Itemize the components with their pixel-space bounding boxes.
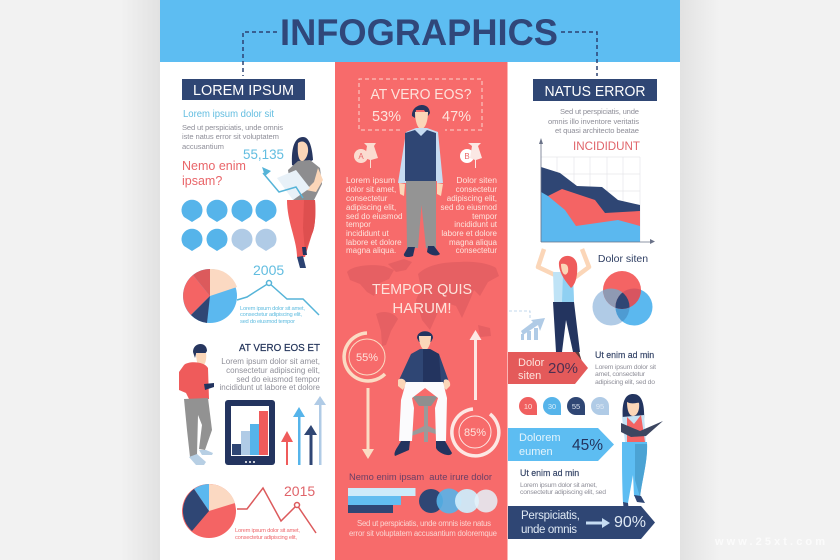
center panel	[335, 62, 508, 560]
text block B: incididunt ut	[454, 220, 498, 229]
banner: dolorem eumen 45%: Dolorem	[519, 432, 561, 444]
dashed frame	[359, 79, 482, 130]
text block B	[441, 175, 498, 255]
text block: at vero eos et: consectetur adipiscing elit,	[226, 366, 320, 375]
text block: at vero eos et	[219, 357, 321, 392]
text block: ut enim: adipiscing elit, sed do	[595, 379, 655, 386]
heading: natus error	[533, 79, 657, 101]
bubble 30: 30	[548, 402, 556, 411]
arrow navy	[304, 425, 317, 465]
dashed connector right	[561, 32, 597, 76]
text block right intro	[548, 107, 639, 135]
subheading: Lorem ipsum dolor sit	[183, 109, 274, 120]
arrow blue	[293, 407, 305, 465]
text block: at vero eos et: Lorem ipsum dolor sit amet,	[221, 357, 320, 366]
bubble 30	[543, 397, 561, 415]
banner: dolor siten 20%	[508, 352, 588, 384]
world map	[347, 259, 499, 346]
progress ring 55%	[344, 333, 385, 381]
caption 2005: Lorem ipsum dolor sit amet,	[240, 306, 305, 312]
caption 2015: consectetur adipiscing elit,	[235, 535, 297, 541]
arrow down	[362, 388, 374, 459]
text block center bottom: error sit voluptatem accusantium doloremque	[349, 529, 497, 538]
banner: perspiciatis 90%: unde omnis	[521, 524, 577, 536]
text block B: Dolor siten	[456, 175, 497, 185]
text block A: tempor	[346, 220, 371, 229]
text block B: consectetur	[456, 185, 497, 194]
text block A: magna aliqua.	[346, 246, 396, 255]
arrow up	[470, 330, 482, 400]
stat 55,135: 55,135	[243, 147, 284, 162]
text block B: tempor	[472, 212, 497, 221]
banner: dolorem eumen 45%	[508, 428, 614, 461]
text block right intro: et quasi architecto beatae	[555, 126, 639, 135]
heading: tempor quis harum: HARUM!	[392, 300, 452, 317]
backdrop shadow left	[120, 0, 160, 560]
pin icons grid	[181, 200, 276, 251]
bubble 55: 55	[572, 402, 580, 411]
text block right intro: omnis illo inventore veritatis	[548, 117, 639, 126]
banner: perspiciatis 90%: 90%	[614, 514, 646, 531]
text block A: labore et dolore	[346, 238, 402, 247]
banner: dolor siten 20%: Dolor	[518, 357, 545, 369]
stat 47%: 47%	[442, 109, 471, 125]
text block B: consectetur	[456, 246, 497, 255]
text block B: magna aliqua	[449, 238, 498, 247]
text block left intro	[182, 123, 283, 151]
figure: seated man	[395, 331, 452, 456]
text block: at vero eos et: sed do eiusmod tempor	[236, 375, 320, 384]
figure: woman with chart	[262, 137, 323, 268]
pie chart 2015	[182, 484, 236, 538]
banner: dolor siten 20%: siten	[518, 370, 541, 382]
banner: perspiciatis 90%: Perspiciatis,	[521, 510, 580, 522]
caption 2015: Lorem ipsum dolor sit amet,	[235, 528, 300, 534]
area chart	[539, 138, 655, 244]
text block center bottom: Sed ut perspiciatis, unde omnis iste natus	[357, 519, 491, 528]
heading: tempor quis harum: TEMPOR QUIS	[372, 281, 472, 298]
year 2015: 2015	[284, 483, 315, 499]
header band	[160, 0, 680, 62]
tablet bar chart	[225, 400, 275, 465]
venn diagram	[592, 271, 652, 326]
bubble 55	[567, 397, 585, 415]
pie chart 2005	[183, 269, 237, 323]
text block: ut enim	[595, 350, 656, 386]
text block center bottom	[349, 519, 497, 538]
text block B: labore et dolore	[441, 229, 498, 238]
text block: ut enim 2: consectetur adipiscing elit, sed	[520, 489, 606, 496]
banner: dolor siten 20%: 20%	[548, 360, 578, 377]
banner: perspiciatis 90%	[508, 506, 655, 539]
bubble 95	[591, 397, 609, 415]
heading: at vero eos et: AT VERO EOS ET	[239, 343, 320, 354]
question	[182, 159, 246, 188]
text block B: adipiscing elit,	[447, 194, 497, 203]
heading: natus error: NATUS ERROR	[544, 83, 646, 100]
year 2005: 2005	[253, 262, 284, 278]
dashed connector to growth icon	[509, 311, 530, 318]
line chart 2015	[237, 488, 316, 533]
stat 53%: 53%	[372, 109, 401, 125]
text block A: adipiscing elit,	[346, 203, 396, 212]
heading: nemo enim: Nemo enim ipsam aute irure dolor	[349, 472, 492, 482]
figure: woman reading	[621, 394, 663, 512]
figure: standing man	[398, 105, 443, 257]
text block: ut enim: amet, consectetur	[595, 371, 646, 378]
figure: man with phone	[179, 344, 214, 465]
text block A: sed do eiusmod	[346, 212, 402, 221]
question: ipsam?	[182, 174, 222, 188]
progress ring 85%	[452, 409, 499, 456]
poster background	[160, 0, 680, 560]
banner: dolorem eumen 45%: 45%	[572, 437, 603, 454]
text block A: incididunt ut	[346, 229, 389, 238]
stacked bars	[348, 488, 416, 513]
heading: at vero eos: AT VERO EOS?	[370, 86, 472, 103]
title: INFOGRAPHICS	[280, 12, 558, 53]
progress ring 55%: 55%	[356, 352, 378, 364]
bubble 10: 10	[524, 402, 532, 411]
text block A: Lorem ipsum	[346, 175, 395, 185]
heading: tempor quis harum	[372, 281, 472, 317]
bubble 95: 95	[596, 402, 604, 411]
heading: lorem ipsum	[182, 79, 305, 100]
arrow red	[281, 431, 293, 465]
chart title: INCIDIDUNT	[573, 139, 641, 153]
backdrop shadow right	[680, 0, 720, 560]
caption 2005: consectetur adipiscing elit,	[240, 312, 302, 318]
caption 2005	[240, 306, 305, 325]
text block B: sed do eiusmod	[441, 203, 497, 212]
text block: ut enim 2	[520, 468, 606, 496]
text block A	[346, 175, 402, 255]
icon: pushpin A: A	[358, 152, 364, 161]
icon: pushpin B: B	[464, 152, 470, 161]
banner: dolorem eumen 45%: eumen	[519, 446, 553, 458]
label: dolor siten: Dolor siten	[598, 253, 648, 265]
text block left intro: iste natus error sit voluptatem	[182, 132, 279, 141]
text block: ut enim: Ut enim ad min	[595, 350, 654, 360]
icon: pushpin A	[354, 143, 378, 168]
dashed connector left	[243, 32, 277, 76]
heading: lorem ipsum: LOREM IPSUM	[193, 82, 294, 99]
text block right intro: Sed ut perspiciatis, unde	[560, 107, 639, 116]
text block A: consectetur	[346, 194, 388, 203]
text block: ut enim: Lorem ipsum dolor sit	[595, 364, 656, 371]
icon: pushpin B	[460, 143, 482, 168]
question: Nemo enim	[182, 159, 246, 173]
text block: at vero eos et: incididunt ut labore et dolore	[219, 383, 321, 392]
text block: ut enim 2: Lorem ipsum dolor sit amet,	[520, 482, 597, 489]
text block left intro: Sed ut perspiciatis, unde omnis	[182, 123, 283, 132]
overlapping circles	[419, 488, 498, 514]
text block A: dolor sit amet,	[346, 185, 396, 194]
text block left intro: accusantium	[182, 142, 224, 151]
caption 2015	[235, 528, 300, 541]
caption 2005: sed do eiusmod tempor	[240, 319, 295, 325]
icon: growth chart	[521, 318, 545, 340]
bubble 10	[519, 397, 537, 415]
watermark: www.25xt.com	[714, 536, 825, 548]
progress ring 85%: 85%	[464, 427, 486, 439]
text block: ut enim 2: Ut enim ad min	[520, 468, 579, 478]
line chart 2005	[237, 280, 319, 315]
arrow light	[314, 396, 326, 465]
figure: woman arms raised	[538, 249, 589, 365]
